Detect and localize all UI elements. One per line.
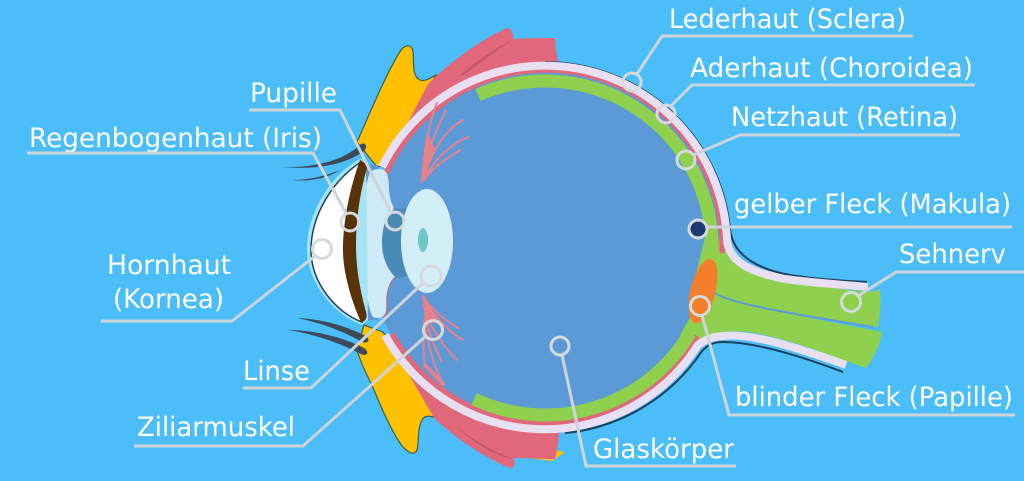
label: Hornhaut — [101, 240, 332, 321]
eye muscle upper shadow — [460, 39, 513, 76]
anterior chamber — [360, 169, 395, 318]
retina lower — [474, 333, 690, 415]
eyelash upper — [283, 144, 366, 181]
label text line 2: (Kornea) — [113, 284, 224, 315]
macula — [689, 220, 707, 238]
label text: Netzhaut (Retina) — [731, 102, 958, 133]
marker — [421, 266, 441, 286]
lash one — [283, 144, 366, 168]
label text: gelber Fleck (Makula) — [734, 189, 1011, 220]
cornea outer rim — [307, 159, 368, 325]
outer dark line upper — [545, 62, 867, 282]
leader line — [134, 336, 426, 446]
eyelid fat lower — [357, 325, 440, 453]
iris brown band — [343, 160, 368, 322]
label: gelber Fleck — [689, 189, 1012, 238]
cornea white — [311, 162, 362, 322]
small yellow tab lower — [525, 445, 565, 461]
cornea — [307, 159, 368, 325]
leader line — [702, 315, 1015, 415]
blind spot — [683, 256, 723, 326]
marker — [341, 213, 359, 231]
leader line — [707, 226, 1012, 228]
eye muscle upper — [384, 28, 560, 168]
marker — [623, 73, 641, 91]
eye muscle lower shadow — [456, 426, 513, 459]
label: Aderhaut — [657, 53, 975, 123]
label text: Ziliarmuskel — [137, 412, 295, 443]
label: Netzhaut — [677, 102, 960, 169]
ciliary fibres lower — [423, 295, 463, 384]
marker — [657, 105, 675, 123]
ciliary fibres upper — [422, 103, 468, 182]
label: Pupille — [249, 78, 404, 230]
label text: Lederhaut (Sclera) — [669, 4, 906, 35]
outer dark line lower — [565, 342, 843, 433]
sclera lower — [385, 335, 846, 429]
label text: Regenbogenhaut (Iris) — [29, 123, 322, 154]
iris pupil area — [381, 208, 408, 278]
chamber red edge — [383, 277, 395, 317]
marker — [424, 320, 442, 340]
label text line 1: Hornhaut — [107, 250, 231, 281]
vitreous body — [368, 71, 722, 425]
marker — [690, 296, 710, 316]
eye muscle lower — [386, 335, 560, 468]
label: Regenbogenhaut — [27, 123, 359, 231]
leader line — [249, 110, 391, 213]
label: blinder Fleck — [690, 296, 1015, 415]
leader line — [27, 153, 346, 213]
label: Glaskörper — [551, 337, 736, 466]
marker — [689, 220, 707, 238]
retina upper — [478, 81, 712, 250]
leader line — [858, 272, 1024, 296]
lens nucleus — [418, 228, 428, 252]
lash three — [297, 318, 369, 343]
leader line — [562, 355, 736, 466]
eye anatomy — [283, 28, 882, 468]
marker — [551, 337, 569, 355]
eyelid fat upper — [357, 46, 436, 167]
leader line — [637, 36, 913, 74]
label: Ziliarmuskel — [134, 320, 442, 446]
label text: blinder Fleck (Papille) — [735, 382, 1013, 413]
nerve upper bundle — [690, 225, 880, 330]
lens — [401, 189, 453, 293]
label: Linse — [243, 266, 441, 388]
marker — [677, 151, 695, 169]
nerve central vessel — [715, 293, 873, 327]
label text: Linse — [243, 356, 310, 387]
eyelash lower — [288, 318, 369, 355]
marker — [386, 212, 404, 230]
optic nerve — [680, 225, 882, 368]
leader line — [693, 135, 960, 155]
leader line — [101, 256, 315, 321]
label text: Aderhaut (Choroidea) — [690, 53, 973, 84]
lash two — [292, 170, 340, 181]
leader line — [671, 85, 975, 106]
nerve lower bundle — [680, 300, 882, 368]
label: Sehnerv — [842, 239, 1024, 312]
label text: Pupille — [250, 78, 337, 109]
choroid upper — [386, 70, 722, 253]
strip behind cornea — [349, 165, 378, 320]
lash four — [288, 330, 367, 355]
label: Lederhaut — [623, 4, 913, 91]
marker — [312, 240, 332, 258]
leader line — [243, 283, 423, 388]
sclera upper — [382, 66, 868, 287]
label text: Sehnerv — [899, 239, 1006, 270]
label text: Glaskörper — [593, 434, 735, 465]
marker — [842, 292, 860, 312]
choroid lower — [392, 334, 697, 423]
